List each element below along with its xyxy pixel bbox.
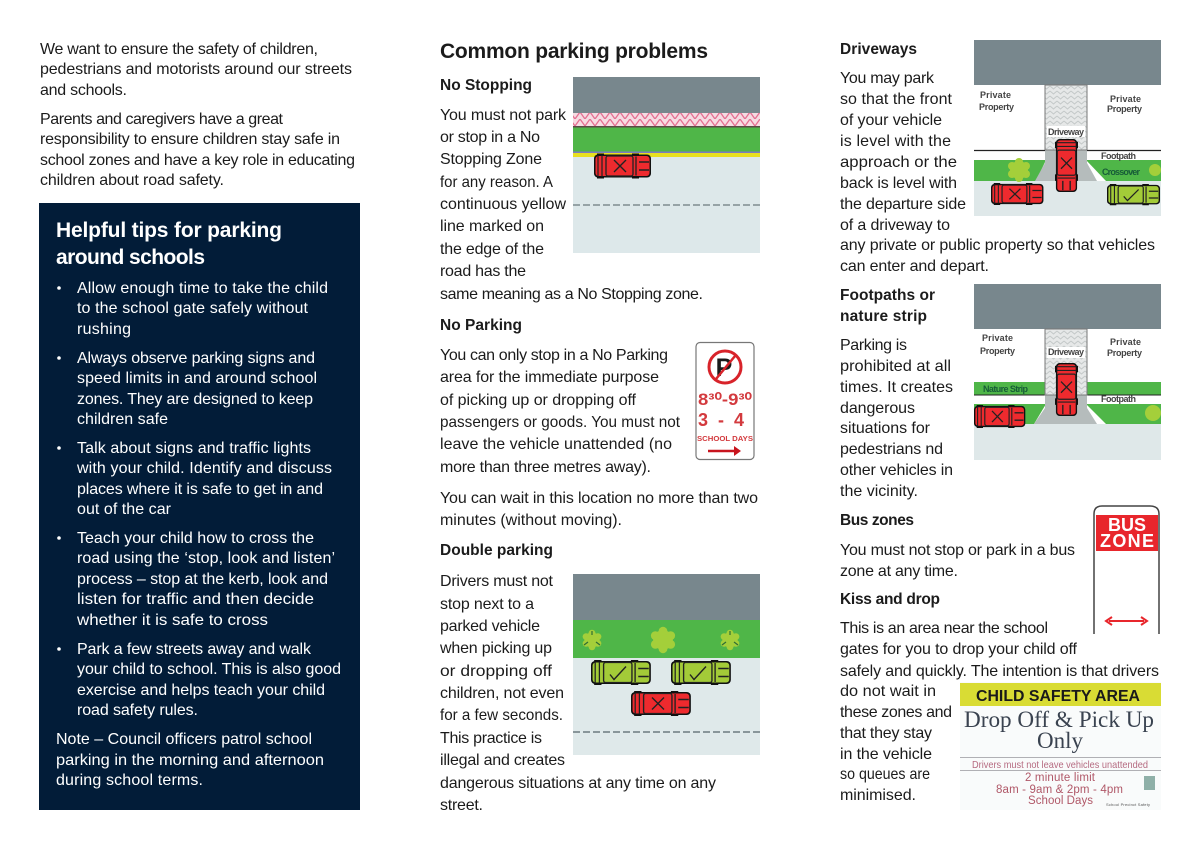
section: double parking text: for a few seconds. <box>440 707 563 724</box>
red car <box>594 154 651 178</box>
section: no parking text: passengers or goods. You must not <box>440 414 681 431</box>
section: kiss and drop text: This is an area near the school <box>840 620 1048 637</box>
illustration: footpath: Property <box>980 346 1015 356</box>
illustration: driveway: Private <box>1110 94 1141 104</box>
illustration: footpath: Private <box>982 333 1013 343</box>
section: footpaths text: nature strip <box>840 308 927 325</box>
section: double parking text: illegal and creates <box>440 752 565 769</box>
section: bus zones text: Bus zones <box>840 512 914 529</box>
section: double parking text: or dropping off <box>440 663 553 680</box>
section: footpaths text: situations for <box>840 420 931 437</box>
section: driveways text: Driveways <box>840 41 917 58</box>
section: no parking text: more than three metres away). <box>440 459 651 476</box>
section: footpaths text: prohibited at all <box>840 358 951 375</box>
section: footpaths text: Footpaths or <box>840 287 935 304</box>
panel heading: around schools <box>56 246 205 269</box>
legal car 2 <box>671 660 731 685</box>
note: during school terms. <box>56 772 203 789</box>
section: kiss and drop text: do not wait in <box>840 683 936 700</box>
section: double parking text: when picking up <box>439 640 552 657</box>
section: driveways text: You may park <box>840 70 935 87</box>
section: bus zones text: zone at any time. <box>840 563 958 580</box>
section: no parking text: leave the vehicle unattended (no <box>440 436 672 453</box>
illustration: double parking road <box>573 574 760 755</box>
section: kiss and drop text: gates for you to drop your child off <box>840 641 1078 658</box>
sign: no parking: 8³⁰-9³⁰ <box>698 390 752 409</box>
section: no parking text: area for the immediate purpose <box>440 369 659 386</box>
tip 4: road using the ‘stop, look and listen’ <box>77 550 335 567</box>
shrubs <box>1008 158 1161 182</box>
section: no parking text <box>440 317 758 529</box>
note: Note – Council officers patrol school <box>56 731 312 748</box>
section: footpaths text: pedestrians nd <box>840 441 943 458</box>
car on nature strip <box>1055 363 1078 416</box>
section: double parking text: dangerous situations at any time on any <box>440 775 716 792</box>
section: kiss and drop text: safely and quickly. The intention is that drivers <box>840 663 1159 680</box>
section: footpaths text <box>840 287 953 500</box>
illustration: driveway <box>974 40 1161 216</box>
illustration: driveway: Crossover <box>1102 167 1140 177</box>
sign: no parking <box>696 342 754 460</box>
section: driveways text: of a driveway to <box>840 217 950 234</box>
section: kiss and drop text: so queues are <box>840 766 930 783</box>
illustration: driveway: Property <box>1107 104 1142 114</box>
section: kiss and drop text: in the vehicle <box>840 746 932 763</box>
section: footpaths text: Parking is <box>840 337 907 354</box>
section: no stopping text: Stopping Zone <box>440 151 542 168</box>
illustration: footpath: Driveway <box>1048 347 1084 357</box>
section: kiss and drop text: that they stay <box>840 725 932 742</box>
section: no stopping text <box>440 77 703 303</box>
section: footpaths text: dangerous <box>840 400 915 417</box>
tip 1 <box>57 280 328 338</box>
note <box>56 731 324 789</box>
illustration: footpath: Property <box>1107 348 1142 358</box>
tip 2 <box>57 350 317 428</box>
sign: no parking: SCHOOL DAYS <box>697 434 753 443</box>
illustration: driveway: Driveway <box>1048 127 1084 137</box>
intro text: We want to ensure the safety of children, <box>40 41 318 58</box>
tip 3: out of the car <box>77 501 172 518</box>
illustration: footpath: Private <box>1110 337 1141 347</box>
section: no stopping text: line marked on <box>440 218 544 235</box>
tip 5: your child to school. This is also good <box>77 661 341 678</box>
illustration: no stopping road <box>573 77 760 253</box>
section: no parking text: You can only stop in a No Parking <box>440 347 668 364</box>
section: driveways text: approach or the <box>840 154 957 171</box>
section: double parking text <box>439 542 716 814</box>
car across driveway <box>1055 139 1078 192</box>
section: no parking text: You can wait in this location no more than two <box>440 490 758 507</box>
section: driveways text: so that the front <box>840 91 953 108</box>
legal car <box>1107 184 1160 205</box>
intro text: children about road safety. <box>40 172 224 189</box>
tip 1: Allow enough time to take the child <box>77 280 328 297</box>
section: no stopping text: or stop in a No <box>440 129 540 146</box>
illustration: footpath: Nature Strip <box>983 384 1028 394</box>
section: footpaths text: times. It creates <box>840 379 953 396</box>
sign: child safety area: 2 minute limit <box>1025 772 1096 784</box>
tip 4: whether it is safe to cross <box>76 612 268 629</box>
sign: child safety area: School Precinct Safety <box>1106 802 1150 807</box>
sign: no parking: P <box>716 354 732 382</box>
car on footpath <box>974 405 1025 428</box>
section: no stopping text: for any reason. A <box>440 174 553 191</box>
section: driveways text: the departure side <box>840 196 966 213</box>
tip 3 <box>57 440 332 518</box>
tip 2: children safe <box>77 411 168 428</box>
tip 3: Talk about signs and traffic lights <box>77 440 311 457</box>
section: driveways text: any private or public property so that vehicles <box>840 237 1155 254</box>
section: footpaths text: the vicinity. <box>840 483 918 500</box>
tip 2: zones. They are designed to keep <box>77 391 313 408</box>
section: double parking text: This practice is <box>440 730 542 747</box>
section: no stopping text: the edge of the <box>440 241 544 258</box>
illustration: footpath: Footpath <box>1101 394 1136 404</box>
section: no parking text: No Parking <box>440 317 522 334</box>
section: footpaths text: other vehicles in <box>840 462 953 479</box>
section: no stopping text: same meaning as a No Stopping zone. <box>440 286 703 303</box>
note: parking in the morning and afternoon <box>56 752 324 769</box>
tip 2: speed limits in and around school <box>77 370 317 387</box>
section: bus zones text: You must not stop or park in a bus <box>840 542 1075 559</box>
section: no stopping text: You must not park <box>440 107 567 124</box>
section: driveways text <box>840 41 1155 275</box>
section: driveways text: can enter and depart. <box>840 258 989 275</box>
tip 4: process – stop at the kerb, look and <box>77 571 328 588</box>
tip 5: road safety rules. <box>77 702 198 719</box>
sign: child safety area: Drop Off & Pick Up <box>964 707 1154 732</box>
section: double parking text: Drivers must not <box>440 573 554 590</box>
illegal car <box>631 691 691 716</box>
section: no stopping text: continuous yellow <box>440 196 566 213</box>
legal car 1 <box>591 660 651 685</box>
intro text: pedestrians and motorists around our streets <box>40 61 352 78</box>
illustration: driveway: Private <box>980 90 1011 100</box>
section: no stopping text: No Stopping <box>440 77 532 94</box>
intro text <box>40 41 355 189</box>
sign: bus zone: BUS <box>1108 515 1146 535</box>
tip 4: listen for traffic and then decide <box>77 591 314 608</box>
tip 5: Park a few streets away and walk <box>77 641 312 658</box>
panel: helpful tips <box>39 203 360 810</box>
tip 4 <box>57 530 335 629</box>
section: driveways text: of your vehicle <box>840 112 942 129</box>
section: double parking text: parked vehicle <box>440 618 540 635</box>
sign: child safety area <box>960 682 1161 810</box>
section: driveways text: back is level with <box>840 175 957 192</box>
section: double parking text: Double parking <box>440 542 553 559</box>
intro text: school zones and have a key role in educating <box>40 152 355 169</box>
section: no stopping text: road has the <box>440 263 526 280</box>
sign: child safety area: Only <box>1037 728 1084 753</box>
sign: bus zone <box>1094 506 1159 634</box>
tip 3: places where it is safe to get in and <box>77 481 323 498</box>
sign: no parking: 3 - 4 <box>698 410 744 430</box>
section: no parking text: minutes (without moving). <box>440 512 622 529</box>
section: double parking text: stop next to a <box>440 596 534 613</box>
sign: bus zone: ZONE <box>1100 531 1154 551</box>
sign: child safety area: School Days <box>1028 795 1093 807</box>
intro text: and schools. <box>40 82 127 99</box>
trees <box>583 627 739 653</box>
panel heading: Helpful tips for parking <box>56 219 282 242</box>
section: driveways text: is level with the <box>840 133 951 150</box>
shrub <box>1145 405 1161 421</box>
section: kiss and drop text: these zones and <box>840 704 952 721</box>
car blocking driveway <box>991 183 1043 205</box>
panel heading <box>56 219 282 269</box>
section: kiss and drop text <box>840 591 1159 804</box>
tip 2: Always observe parking signs and <box>77 350 315 367</box>
tip 3: with your child. Identify and discuss <box>76 460 332 477</box>
tip 4: Teach your child how to cross the <box>77 530 314 547</box>
section: no parking text: of picking up or dropping off <box>440 392 637 409</box>
section: kiss and drop text: minimised. <box>840 787 916 804</box>
illustration: driveway: Footpath <box>1101 151 1136 161</box>
illustration: footpath <box>974 284 1161 460</box>
sign: child safety area: CHILD SAFETY AREA <box>976 688 1140 705</box>
illustration: driveway: Property <box>979 102 1014 112</box>
title: common parking problems: Common parking problems <box>440 40 708 63</box>
intro text: Parents and caregivers have a great <box>40 111 284 128</box>
tip 5 <box>57 641 341 719</box>
section: kiss and drop text: Kiss and drop <box>840 591 940 608</box>
intro text: responsibility to ensure children stay safe in <box>40 131 340 148</box>
section: double parking text: children, not even <box>440 685 564 702</box>
section: bus zones text <box>840 512 1075 580</box>
sign: child safety area: Drivers must not leave vehicles unattended <box>972 759 1148 771</box>
sign: child safety area: 8am - 9am & 2pm - 4pm <box>996 784 1123 796</box>
tip 1: rushing <box>77 321 131 338</box>
section: double parking text: street. <box>440 797 483 814</box>
tip 1: to the school gate safely without <box>77 300 309 317</box>
tip 5: exercise and helps teach your child <box>77 682 325 699</box>
